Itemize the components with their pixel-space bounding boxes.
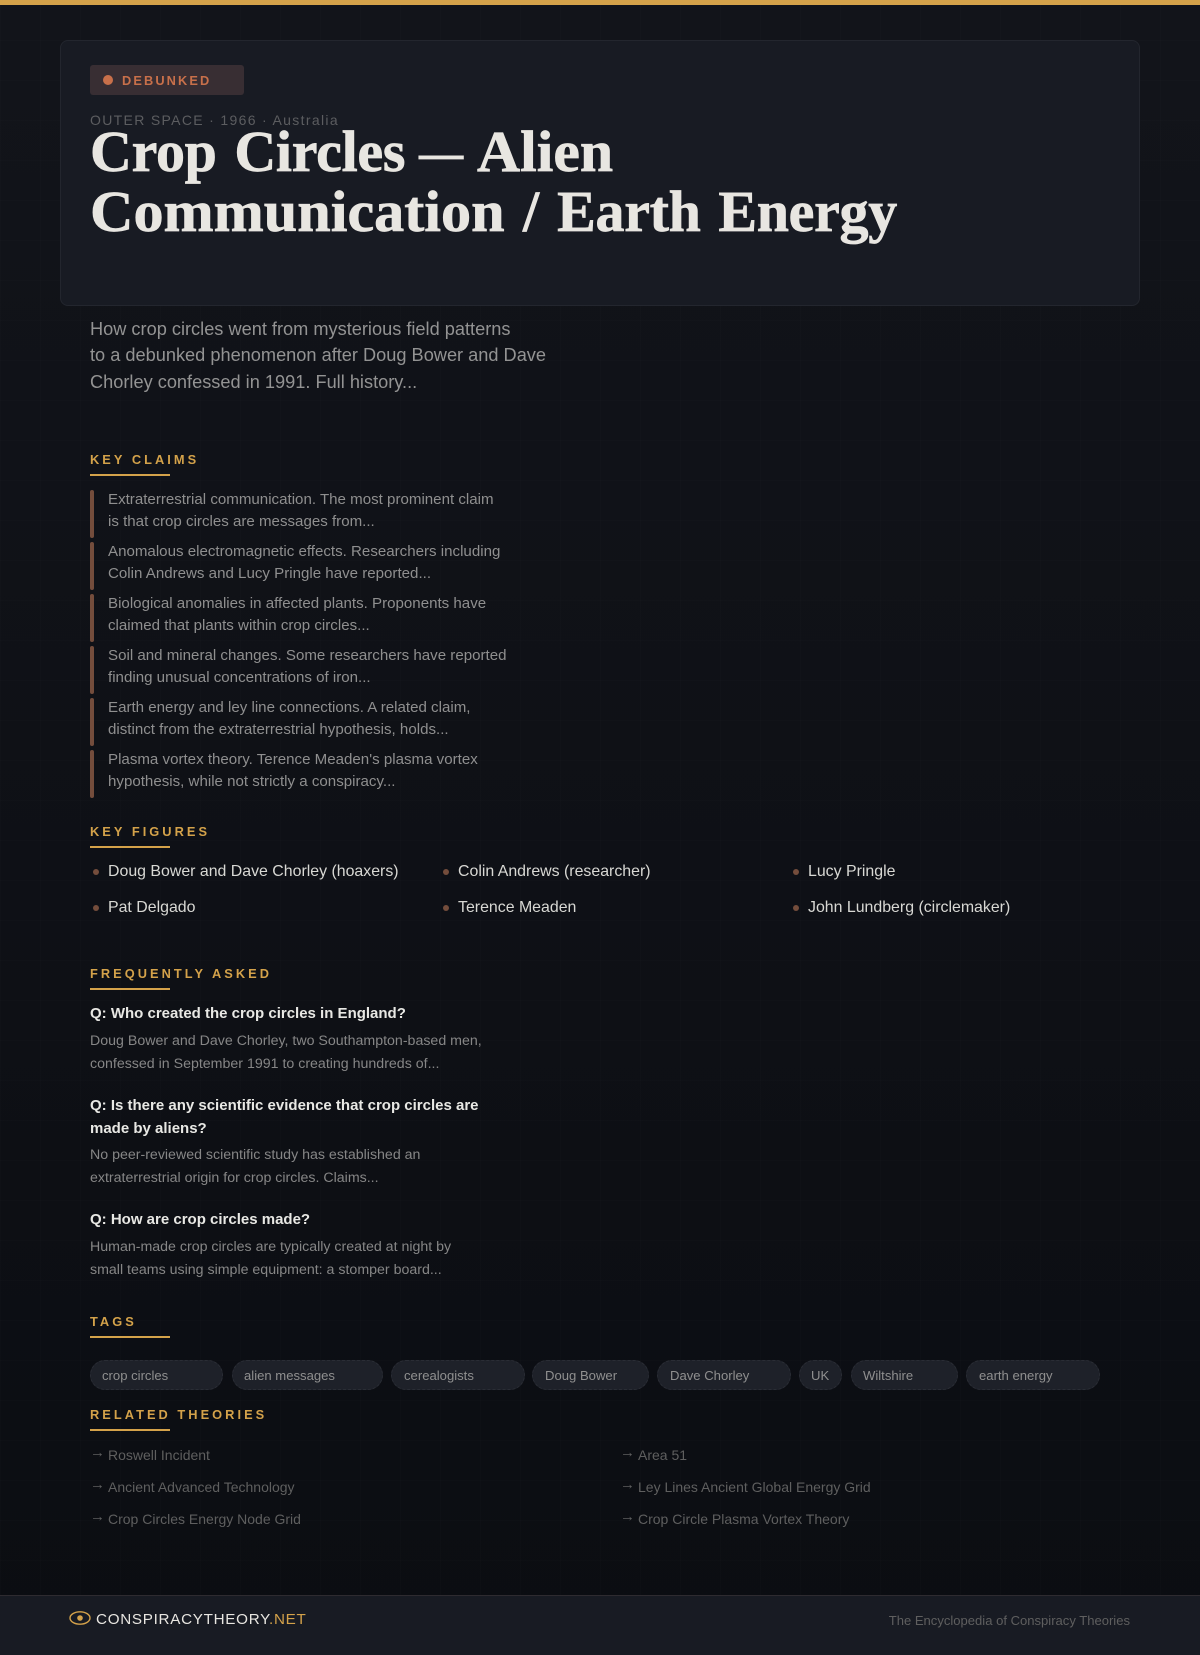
tag: Dave Chorley: Dave Chorley: [670, 1368, 749, 1383]
badge: debunked status: DEBUNKED: [122, 73, 211, 88]
claim 5: Earth energy and ley line connections. A related claim,: [108, 698, 470, 716]
title: Communication: [90, 179, 505, 244]
claim 4: [90, 646, 507, 694]
text block: description: [90, 319, 546, 392]
link: Roswell Incident: →: [90, 1444, 105, 1461]
heading: frequently asked: FREQUENTLY ASKED: [90, 966, 272, 981]
link: Roswell Incident: Roswell Incident: [108, 1447, 210, 1463]
panel: key claims list: [90, 490, 507, 798]
link: Crop Circle Plasma Vortex Theory: Crop Circle Plasma Vortex Theory: [638, 1511, 849, 1527]
heading: tags: TAGS: [90, 1314, 137, 1329]
claim 6: [90, 750, 478, 798]
answer 1: Doug Bower and Dave Chorley, two Southampton-based men,: [90, 1033, 482, 1049]
meta line: category, year, location: OUTER SPACE · 1966 · Australia: [90, 112, 339, 128]
link: Crop Circles Energy Node Grid: Crop Circles Energy Node Grid: [108, 1511, 301, 1527]
tag: earth energy: earth energy: [979, 1368, 1053, 1383]
heading: related theories: RELATED THEORIES: [90, 1407, 267, 1422]
tag: Doug Bower: [532, 1360, 649, 1390]
tag: Dave Chorley: [657, 1360, 791, 1390]
claim 1: Extraterrestrial communication. The most prominent claim: [108, 490, 494, 508]
heading: key claims: KEY CLAIMS: [90, 452, 199, 467]
icon: eye logo: [69, 1611, 91, 1625]
figure: Doug Bower and Dave Chorley: Doug Bower and Dave Chorley (hoaxers): [108, 863, 399, 880]
link: Area 51: [620, 1444, 687, 1463]
link: Ancient Advanced Technology: →: [90, 1476, 105, 1493]
tag: crop circles: [90, 1360, 223, 1390]
logo wordmark: CONSPIRACYTHEORY.NET: [96, 1611, 306, 1628]
claim 4: finding unusual concentrations of iron...: [108, 669, 371, 686]
link: Ancient Advanced Technology: Ancient Advanced Technology: [108, 1479, 295, 1495]
tag: earth energy: [966, 1360, 1100, 1390]
answer 1: [90, 1033, 482, 1072]
tag: UK: [799, 1360, 842, 1390]
answer 2: No peer-reviewed scientific study has established an: [90, 1147, 420, 1163]
answer 2: extraterrestrial origin for crop circles. Claims...: [90, 1170, 379, 1186]
text block: description: How crop circles went from mysterious field patterns: [90, 319, 510, 339]
link: Crop Circle Plasma Vortex Theory: →: [620, 1508, 635, 1525]
answer 2: [90, 1147, 420, 1186]
badge: debunked status: [90, 65, 244, 95]
claim 1: [90, 490, 494, 538]
text block: description: Chorley confessed in 1991. Full history...: [90, 372, 417, 392]
claim 4: Soil and mineral changes. Some researchers have reported: [108, 646, 507, 664]
panel: key figures list: [93, 863, 1010, 916]
figure: Lucy Pringle: Lucy Pringle: [808, 863, 895, 880]
question 1: Q: Who created the crop circles in England?: [90, 1004, 406, 1022]
link: Ley Lines Ancient Global Energy Grid: →: [620, 1476, 635, 1493]
claim 2: Anomalous electromagnetic effects. Researchers including: [108, 542, 500, 560]
tag: UK: UK: [811, 1368, 829, 1383]
figure: Terence Meaden: Terence Meaden: [458, 899, 576, 916]
question 2: made by aliens?: [90, 1120, 207, 1136]
tag: alien messages: [232, 1360, 383, 1390]
tag: crop circles: crop circles: [102, 1368, 168, 1383]
figure: Pat Delgado: Pat Delgado: [108, 899, 195, 916]
claim 2: [90, 542, 500, 590]
claim 3: [90, 594, 486, 642]
panel: header card: [60, 40, 1140, 306]
footer tagline: The Encyclopedia of Conspiracy Theories: [889, 1613, 1130, 1628]
title: Alien: [477, 119, 613, 184]
footer bar: [0, 1595, 1200, 1655]
claim 5: distinct from the extraterrestrial hypothesis, holds...: [108, 721, 449, 738]
figure: Colin Andrews: Colin Andrews (researcher): [458, 863, 651, 880]
answer 1: confessed in September 1991 to creating hundreds of...: [90, 1056, 439, 1072]
tag: Wiltshire: Wiltshire: [863, 1368, 913, 1383]
answer 3: Human-made crop circles are typically created at night by: [90, 1239, 451, 1255]
question 2: Q: Is there any scientific evidence that crop circles are: [90, 1096, 478, 1114]
tag: cerealogists: cerealogists: [404, 1368, 474, 1383]
title: Crop Circles —: [90, 119, 463, 184]
title: [90, 119, 898, 244]
heading: key figures: KEY FIGURES: [90, 824, 210, 839]
claim 6: Plasma vortex theory. Terence Meaden's plasma vortex: [108, 750, 478, 768]
question 3: Q: How are crop circles made?: [90, 1210, 310, 1228]
panel: related theories links: [90, 1444, 871, 1527]
answer 3: small teams using simple equipment: a stomper board...: [90, 1262, 442, 1278]
tag: alien messages: alien messages: [244, 1368, 335, 1383]
tag: cerealogists: [391, 1360, 525, 1390]
claim 2: Colin Andrews and Lucy Pringle have reported...: [108, 565, 431, 582]
text block: description: to a debunked phenomenon after Doug Bower and Dave: [90, 345, 546, 365]
claim 3: Biological anomalies in affected plants. Proponents have: [108, 594, 486, 612]
title: / Earth Energy: [523, 179, 897, 244]
figure: John Lundberg: John Lundberg (circlemaker): [808, 899, 1010, 916]
claim 3: claimed that plants within crop circles...: [108, 617, 370, 634]
answer 3: [90, 1239, 451, 1278]
tag: Wiltshire: [851, 1360, 958, 1390]
link: Ley Lines Ancient Global Energy Grid: Ley Lines Ancient Global Energy Grid: [638, 1479, 871, 1495]
tag: Doug Bower: Doug Bower: [545, 1368, 617, 1383]
link: Area 51: Area 51: [638, 1447, 687, 1463]
claim 1: is that crop circles are messages from...: [108, 513, 375, 530]
claim 5: [90, 698, 470, 746]
link: Crop Circles Energy Node Grid: →: [90, 1508, 105, 1525]
question 2: [90, 1096, 478, 1136]
claim 6: hypothesis, while not strictly a conspiracy...: [108, 773, 395, 790]
link: Area 51: →: [620, 1444, 635, 1461]
